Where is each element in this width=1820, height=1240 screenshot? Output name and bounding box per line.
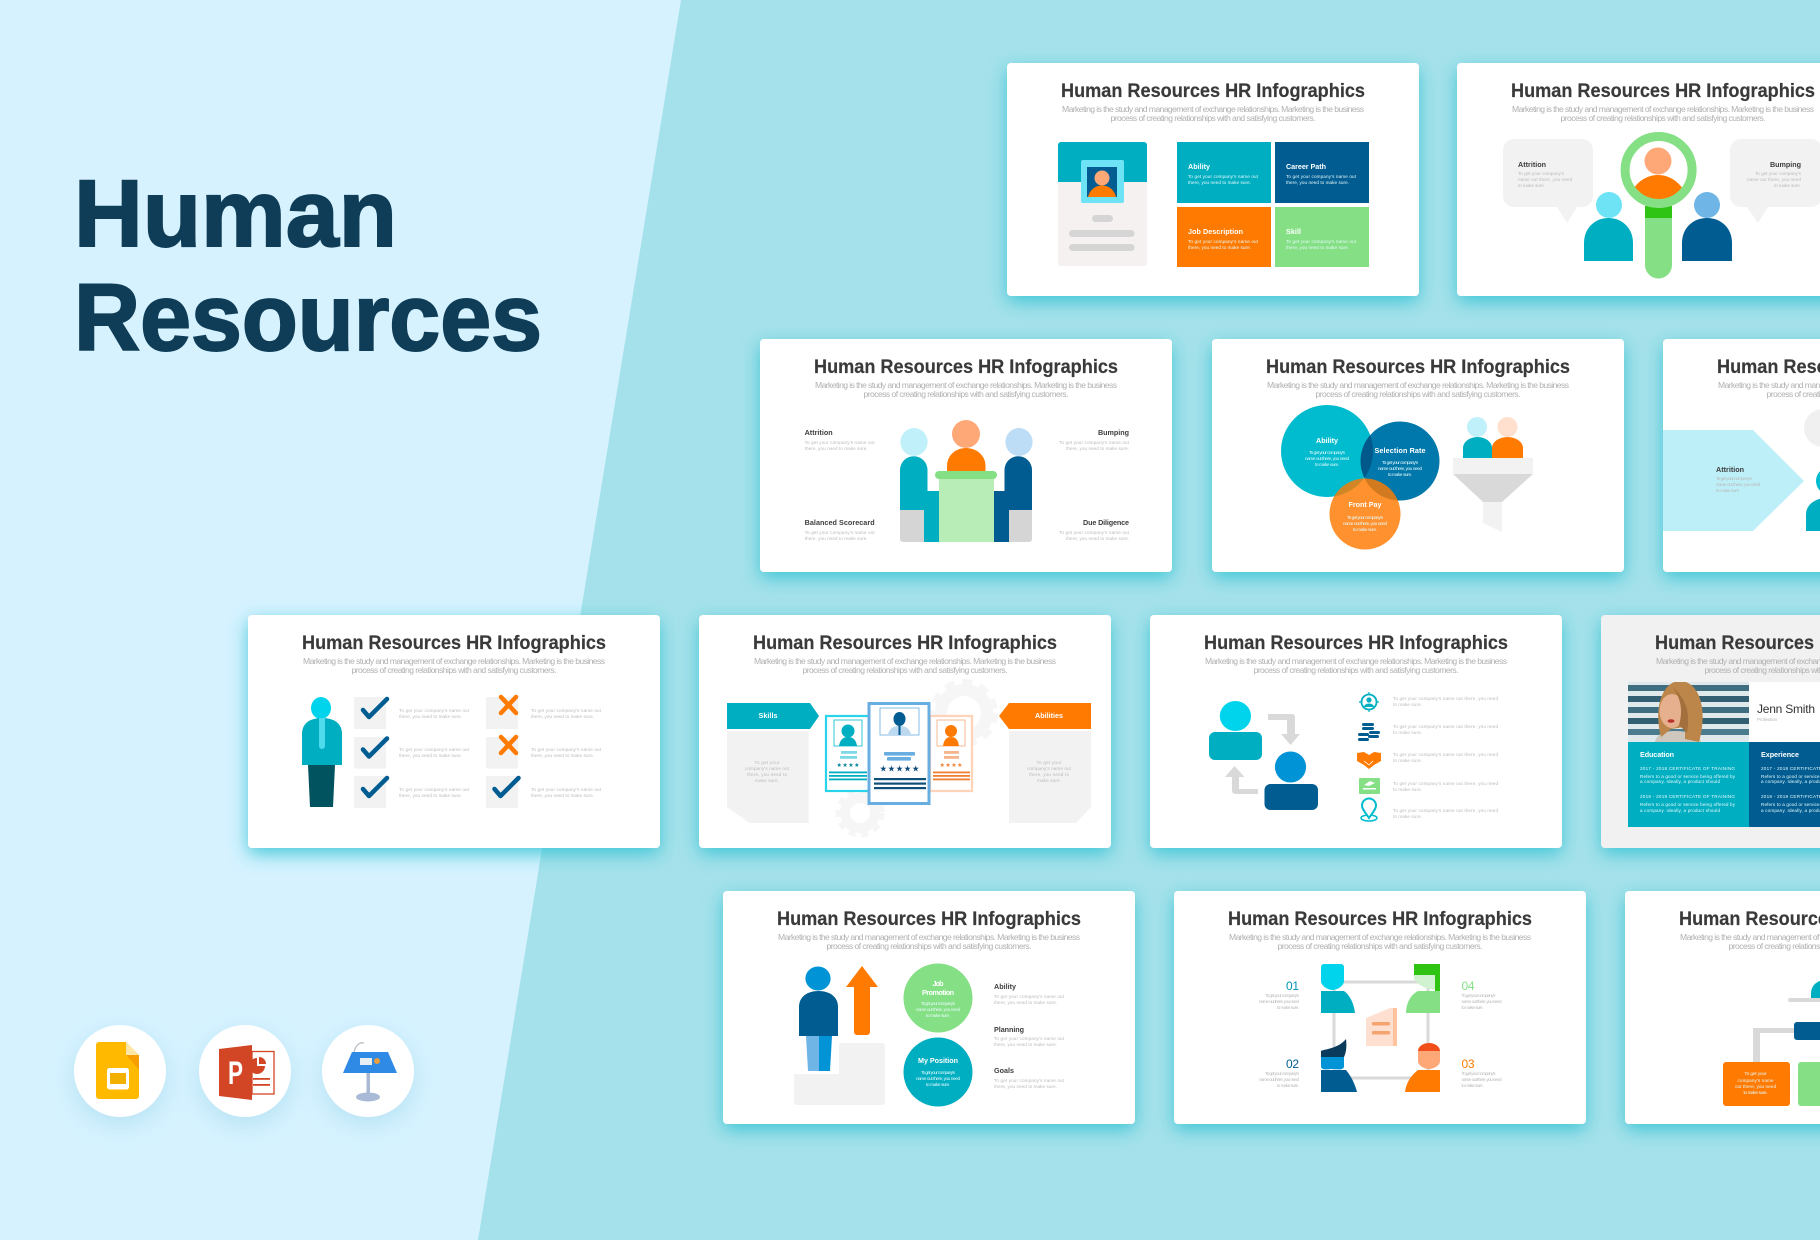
- skills panel: company's name out: [745, 766, 790, 771]
- label 02: [1259, 1057, 1300, 1088]
- icon: green ticket: [1359, 778, 1380, 794]
- tile: skill: there, you need to make sure.: [1286, 245, 1349, 250]
- arrow with attrition: To get your company's: [1716, 476, 1753, 481]
- slide subtitle: [1267, 380, 1569, 399]
- label 04: 04: [1462, 979, 1475, 993]
- document: [1366, 1008, 1397, 1046]
- labels: ability planning goals: [994, 982, 1065, 1089]
- circle: my position: [904, 1038, 972, 1106]
- name block: [1749, 682, 1820, 742]
- label: balanced scorecard: To get your company's name out: [805, 530, 875, 535]
- tile: ability: To get your company's name out: [1188, 174, 1259, 179]
- label 03: [1462, 1057, 1502, 1088]
- circle: job promotion: to make sure.: [926, 1013, 950, 1018]
- tile: career path: To get your company's name out: [1286, 174, 1357, 179]
- name block: Profession: [1757, 717, 1777, 722]
- resume center: ★★★★★: [880, 764, 920, 774]
- label 03: name out there, you need: [1462, 1077, 1502, 1082]
- checklist text: there, you need to make sure.: [399, 714, 462, 719]
- circle: job promotion: name out there, you need: [916, 1007, 960, 1012]
- slide title: Human Resources HR Infographics: [1061, 80, 1365, 102]
- slide title: Human Resources HR Infographics: [1266, 356, 1570, 378]
- funnel with people: [1453, 417, 1533, 532]
- education panel: 2017 - 2018 CERTIFICATE OF TRAINING: [1640, 766, 1735, 771]
- list text: To get your company's name out there, you need: [1393, 781, 1498, 786]
- icon: map pin: [1361, 798, 1377, 821]
- labels: ability planning goals: there, you need to make sure.: [994, 1084, 1057, 1089]
- checklist text: To get your company's name out: [531, 787, 602, 792]
- label: attrition: Attrition: [805, 428, 833, 437]
- box: orange: to make sure.: [1744, 1090, 1768, 1095]
- label 04: To get your company's: [1462, 993, 1496, 998]
- label: balanced scorecard: [805, 518, 875, 541]
- venn diagram: name out there, you need: [1378, 466, 1422, 471]
- venn diagram: To get your company's: [1347, 515, 1384, 520]
- label: due diligence: To get your company's name out: [1059, 530, 1130, 535]
- slide: four people cycle: [1174, 891, 1586, 1124]
- slide subtitle: Marketing is the study and management of exchange relationships. Marketing is the business: [1062, 104, 1364, 114]
- label: attrition: To get your company's name out: [805, 440, 875, 445]
- checklist text: there, you need to make sure.: [399, 793, 462, 798]
- slide: resume profile: [1601, 615, 1820, 848]
- person 01: [1321, 964, 1355, 1013]
- label 01: name out there, you need: [1259, 999, 1299, 1004]
- circle: job promotion: Promotion: [922, 988, 954, 997]
- abilities panel: make sure.: [1037, 778, 1061, 783]
- venn diagram: Selection Rate: [1374, 446, 1426, 455]
- label: bumping: [1059, 428, 1130, 451]
- resume left: ★★★★: [836, 762, 860, 769]
- venn diagram: To get your company's: [1309, 450, 1346, 455]
- label 04: to make sure.: [1462, 1005, 1484, 1010]
- checklist text: To get your company's name out: [531, 708, 602, 713]
- labels: ability planning goals: there, you need to make sure.: [994, 1042, 1057, 1047]
- education panel: a company. Ideally, a product should: [1640, 779, 1720, 784]
- resume left: [826, 716, 869, 791]
- checklist text: there, you need to make sure.: [399, 753, 462, 758]
- person right: [1682, 192, 1732, 261]
- tile: ability: [1177, 142, 1271, 203]
- label: due diligence: Due Diligence: [1083, 518, 1129, 527]
- venn diagram: To get your company's: [1382, 460, 1419, 465]
- speech bubble: attrition: [1503, 139, 1593, 223]
- speech bubble: attrition: to make sure.: [1518, 183, 1545, 188]
- left light panel: [0, 0, 681, 1240]
- speech bubble: attrition: Attrition: [1518, 160, 1546, 169]
- labels: ability planning goals: To get your company's name out: [994, 1036, 1065, 1041]
- box: orange: [1723, 1062, 1790, 1106]
- slide title: Human Resources HR Infographics: [302, 632, 606, 654]
- label 04: name out there, you need: [1462, 999, 1502, 1004]
- labels: ability planning goals: Goals: [994, 1066, 1014, 1075]
- labels: ability planning goals: Planning: [994, 1025, 1024, 1034]
- person bottom: [1264, 752, 1318, 810]
- main title: Resources: [74, 265, 542, 371]
- person left: [1584, 192, 1633, 261]
- experience panel: [1749, 742, 1820, 827]
- slide: skills abilities: [699, 615, 1111, 848]
- slide: org chart partial: [1625, 891, 1820, 1124]
- list text: [1393, 696, 1498, 819]
- speech bubble: bumping: To get your company's: [1755, 171, 1802, 176]
- person on steps: [799, 966, 838, 1071]
- skills panel: [727, 703, 819, 823]
- venn diagram: to make sure.: [1388, 472, 1412, 477]
- labels: ability planning goals: there, you need to make sure.: [994, 1000, 1057, 1005]
- person 02: [1321, 1039, 1357, 1092]
- slide subtitle: [1062, 104, 1364, 123]
- icon: handshake: [1357, 752, 1381, 769]
- connector frame: [1334, 982, 1428, 1078]
- checklist squares: [354, 697, 518, 808]
- list text: to make sure.: [1393, 758, 1422, 763]
- slide subtitle: [303, 656, 605, 675]
- gears: [838, 682, 995, 835]
- label 01: [1259, 979, 1300, 1010]
- up arrow: [846, 966, 878, 1035]
- label: bumping: there, you need to make sure.: [1066, 446, 1129, 451]
- resume right: ★★★★: [940, 762, 962, 769]
- tile: skill: [1275, 207, 1369, 267]
- education panel: Refers to a good or service being offered by: [1640, 774, 1736, 779]
- circle: my position: To get your company's: [921, 1070, 956, 1075]
- checklist text: To get your company's name out: [399, 708, 470, 713]
- slide title: Human Resources HR Infographics: [814, 356, 1118, 378]
- label 01: To get your company's: [1265, 993, 1300, 998]
- slide subtitle: process of creating relationships with and satisfying customers.: [352, 665, 556, 675]
- abilities panel: To get your: [1036, 760, 1062, 765]
- box: orange: out there, you need: [1735, 1084, 1776, 1089]
- check marks: [363, 699, 518, 796]
- speech bubble: bumping: [1730, 139, 1820, 223]
- id card: [1058, 142, 1147, 266]
- skills panel: make sure.: [755, 778, 779, 783]
- circle: job promotion: [904, 964, 972, 1032]
- org chart: [1753, 980, 1820, 1062]
- labels: ability planning goals: Ability: [994, 982, 1016, 991]
- slide subtitle: [1718, 380, 1820, 399]
- box: orange: To get your: [1744, 1071, 1767, 1076]
- labels: ability planning goals: To get your company's name out: [994, 1078, 1065, 1083]
- venn diagram: to make sure.: [1353, 527, 1377, 532]
- label 01: 01: [1286, 979, 1299, 993]
- label 02: to make sure.: [1277, 1083, 1299, 1088]
- list text: to make sure.: [1393, 730, 1422, 735]
- slide subtitle: process of creating relationships with and satisfying customers.: [826, 941, 1032, 951]
- slide subtitle: Marketing is the study and management of exchange relationships. Marketing is the business: [1267, 380, 1569, 390]
- label 03: 03: [1462, 1057, 1475, 1071]
- slide subtitle: [1205, 656, 1507, 675]
- venn diagram: to make sure.: [1315, 462, 1339, 467]
- arrow with attrition: to make sure.: [1716, 488, 1740, 493]
- label 02: To get your company's: [1265, 1071, 1300, 1076]
- tile: skill: Skill: [1286, 227, 1301, 236]
- slide subtitle: process of creating relationships with and satisfying customers.: [1316, 389, 1520, 399]
- label 02: name out there, you need: [1259, 1077, 1299, 1082]
- skills panel: there, you need to: [747, 772, 787, 777]
- list text: To get your company's name out there, you need: [1393, 808, 1498, 813]
- person 04: [1406, 964, 1440, 1013]
- slide: venn funnel: [1212, 339, 1624, 572]
- icon: google slides: [74, 1025, 166, 1117]
- slide subtitle: Marketing is the study and management of exchange relationships. Marketing is the business: [303, 656, 605, 666]
- circle: job promotion: To get your company's: [921, 1001, 956, 1006]
- slide subtitle: process of creating relationships with and satisfying customers.: [864, 389, 1068, 399]
- slide title: Human Resources HR Infographics: [753, 632, 1057, 654]
- box: green: [1798, 1062, 1820, 1106]
- tile: job description: Job Description: [1188, 227, 1243, 236]
- tile: career path: Career Path: [1286, 162, 1326, 171]
- label: due diligence: there, you need to make sure.: [1066, 536, 1129, 541]
- slide title: Human Resources HR Infographics: [777, 908, 1081, 930]
- label: attrition: [805, 428, 875, 451]
- list text: To get your company's name out there, you need: [1393, 752, 1498, 757]
- education panel: 2018 - 2019 CERTIFICATE OF TRAINING: [1640, 794, 1735, 799]
- slide subtitle: process of creating relationships with and satisfying customers.: [1560, 113, 1766, 123]
- slide subtitle: [1656, 656, 1820, 675]
- experience panel: Experience: [1761, 750, 1799, 759]
- list text: To get your company's name out there, you need: [1393, 696, 1498, 701]
- resume right: [930, 716, 972, 791]
- abilities panel: [999, 703, 1091, 823]
- box: orange: company's name: [1738, 1078, 1774, 1083]
- circle: my position: My Position: [918, 1056, 958, 1065]
- education panel: Education: [1640, 750, 1674, 759]
- label: due diligence: [1059, 518, 1130, 541]
- venn diagram: name out there, you need: [1305, 456, 1349, 461]
- slide: exchange list: [1150, 615, 1562, 848]
- exchange arrows: [1225, 714, 1300, 794]
- portrait photo: [1628, 681, 1749, 742]
- slide: magnifier: [1457, 63, 1820, 296]
- slide subtitle: [778, 932, 1080, 951]
- magnifier: [1625, 136, 1692, 278]
- arrow with attrition: name out there, you need: [1716, 482, 1760, 487]
- slide: checklist: [248, 615, 660, 848]
- venn diagram: [1281, 405, 1440, 550]
- podium illustration: [900, 420, 1033, 542]
- list text: to make sure.: [1393, 814, 1422, 819]
- tile: job description: [1177, 207, 1271, 267]
- slide subtitle: [1512, 104, 1814, 123]
- label: bumping: Bumping: [1098, 428, 1129, 437]
- slide subtitle: [1229, 932, 1531, 951]
- label 02: 02: [1286, 1057, 1299, 1071]
- slide subtitle: Marketing is the study and management of exchange relationships. Marketing is the business: [1512, 104, 1814, 114]
- arrow with attrition: [1663, 430, 1804, 531]
- slide subtitle: [815, 380, 1117, 399]
- label 03: To get your company's: [1462, 1071, 1496, 1076]
- checklist text: there, you need to make sure.: [531, 714, 594, 719]
- slide subtitle: process of creating relationships with and satisfying customers.: [802, 665, 1008, 675]
- slide subtitle: [754, 656, 1056, 675]
- speech bubble: bumping: Bumping: [1770, 160, 1801, 169]
- tile: job description: there, you need to make sure.: [1188, 245, 1251, 250]
- slide: promotion: [723, 891, 1135, 1124]
- main title: Human: [74, 161, 397, 267]
- label 01: to make sure.: [1277, 1005, 1299, 1010]
- checklist text: [399, 708, 602, 798]
- label: balanced scorecard: Balanced Scorecard: [805, 518, 875, 527]
- checklist text: To get your company's name out: [399, 787, 470, 792]
- education panel: Refers to a good or service being offered by: [1640, 802, 1736, 807]
- tile: job description: To get your company's name out: [1188, 239, 1259, 244]
- venn diagram: name out there, you need: [1343, 521, 1387, 526]
- venn diagram: Ability: [1316, 436, 1338, 445]
- tile: ability: Ability: [1188, 162, 1210, 171]
- abilities panel: company's name out: [1027, 766, 1072, 771]
- label 03: to make sure.: [1462, 1083, 1484, 1088]
- name block: Jenn Smith: [1757, 702, 1815, 716]
- skills panel: Skills: [758, 711, 778, 720]
- arrow with attrition: Attrition: [1716, 465, 1744, 474]
- slide subtitle: Marketing is the study and management of exchange relationships. Marketing is the business: [1229, 932, 1531, 942]
- circle: my position: name out there, you need: [916, 1076, 960, 1081]
- speech bubble: attrition: name out there, you need: [1518, 177, 1572, 182]
- slide: ability career path: [1007, 63, 1419, 296]
- checklist text: there, you need to make sure.: [531, 793, 594, 798]
- x marks: [501, 697, 516, 753]
- icon: target person: [1359, 692, 1379, 712]
- speech bubble: bumping: to make sure.: [1774, 183, 1801, 188]
- list text: to make sure.: [1393, 702, 1422, 707]
- label: attrition: there, you need to make sure.: [805, 446, 868, 451]
- steps: [794, 1043, 885, 1105]
- checklist text: there, you need to make sure.: [531, 753, 594, 758]
- checklist text: To get your company's name out: [531, 747, 602, 752]
- person 03: [1405, 1043, 1440, 1092]
- slide title: Human Resources HR Infographics: [1204, 632, 1508, 654]
- speech bubble: bumping: name out there, you need: [1747, 177, 1801, 182]
- tile: skill: To get your company's name out: [1286, 239, 1357, 244]
- speech bubble: attrition: To get your company's: [1518, 171, 1565, 176]
- circle: job promotion: Job: [932, 979, 944, 988]
- icon: powerpoint: [199, 1025, 291, 1117]
- slide: podium: [760, 339, 1172, 572]
- label: bumping: To get your company's name out: [1059, 440, 1130, 445]
- resume center: [869, 704, 929, 804]
- tile: career path: [1275, 142, 1369, 203]
- slide subtitle: [1680, 932, 1820, 951]
- education panel: a company. Ideally, a product should: [1640, 808, 1720, 813]
- tile: ability: there, you need to make sure.: [1188, 180, 1251, 185]
- slide subtitle: Marketing is the study and management of exchange relationships. Marketing is the business: [1205, 656, 1507, 666]
- slide: arrow partial: [1663, 339, 1820, 572]
- label: balanced scorecard: there, you need to make sure.: [805, 536, 868, 541]
- tile: career path: there, you need to make sure.: [1286, 180, 1349, 185]
- slide subtitle: process of creating relationships with and satisfying customers.: [1278, 941, 1482, 951]
- icon: coins: [1358, 723, 1380, 741]
- label 04: [1462, 979, 1502, 1010]
- partial people: [1804, 409, 1820, 531]
- circle: my position: to make sure.: [926, 1082, 950, 1087]
- list text: to make sure.: [1393, 787, 1422, 792]
- skills panel: To get your: [754, 760, 780, 765]
- labels: ability planning goals: To get your company's name out: [994, 994, 1065, 999]
- abilities panel: Abilities: [1035, 711, 1063, 720]
- slide subtitle: Marketing is the study and management of exchange relationships. Marketing is the business: [778, 932, 1080, 942]
- slide subtitle: Marketing is the study and management of exchange relationships. Marketing is the business: [754, 656, 1056, 666]
- slide subtitle: process of creating relationships with and satisfying customers.: [1254, 665, 1458, 675]
- main title: [74, 161, 542, 371]
- icon: powerpoint: P: [228, 1055, 243, 1091]
- list text: To get your company's name out there, you need: [1393, 724, 1498, 729]
- person top: [1209, 701, 1262, 760]
- venn diagram: Front Pay: [1348, 500, 1382, 509]
- checklist text: To get your company's name out: [399, 747, 470, 752]
- education panel: [1628, 742, 1749, 827]
- abilities panel: there, you need to: [1029, 772, 1069, 777]
- slide subtitle: Marketing is the study and management of exchange relationships. Marketing is the business: [815, 380, 1117, 390]
- slide title: Human Resources HR Infographics: [1228, 908, 1532, 930]
- icon: keynote: [322, 1025, 414, 1117]
- standing person: [302, 697, 342, 807]
- slide subtitle: process of creating relationships with and satisfying customers.: [1110, 113, 1316, 123]
